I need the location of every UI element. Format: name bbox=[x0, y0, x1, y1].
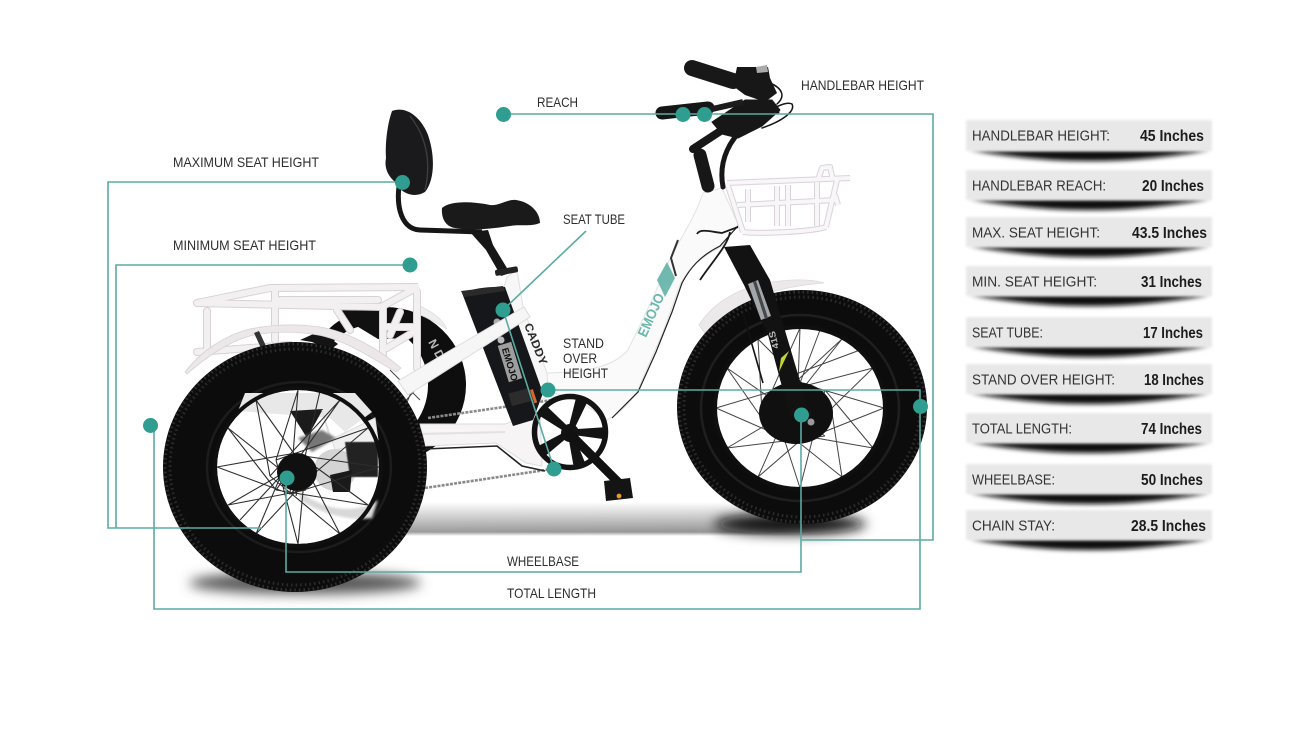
far rear wheel: N D bbox=[425, 337, 448, 362]
spec row: min seat height bbox=[966, 266, 1212, 306]
rear hub bbox=[277, 453, 317, 491]
rear rack bbox=[197, 287, 418, 368]
spec row: max seat height bbox=[966, 217, 1212, 257]
spec row: total length: 74 Inches bbox=[1141, 421, 1202, 438]
far rear wheel bbox=[304, 307, 466, 463]
measurement dots bbox=[143, 107, 928, 486]
diagram labels: SEAT TUBE bbox=[563, 211, 625, 227]
spec row: min seat height: 31 Inches bbox=[1141, 274, 1202, 291]
diagram labels: HEIGHT bbox=[563, 365, 608, 381]
lower handlebar grip bbox=[662, 102, 743, 113]
spec row: max seat height: MAX. SEAT HEIGHT: bbox=[972, 226, 1100, 242]
diagram labels: WHEELBASE bbox=[507, 553, 579, 569]
rear axle frame tubes bbox=[420, 412, 545, 471]
diagram labels: TOTAL LENGTH bbox=[507, 585, 596, 601]
front fender bbox=[699, 280, 824, 333]
fork bbox=[724, 245, 808, 416]
spec row: stand over height bbox=[966, 364, 1212, 404]
rear spokes bbox=[217, 390, 379, 544]
fork: 41S bbox=[767, 330, 781, 350]
rear fender near side bbox=[185, 325, 401, 374]
black cargo box under rack bbox=[337, 310, 413, 339]
seat tube bbox=[500, 270, 552, 405]
diagram labels: STAND bbox=[563, 335, 604, 351]
spec row: max seat height: 43.5 Inches bbox=[1132, 225, 1207, 242]
spec row: handlebar reach bbox=[966, 170, 1212, 210]
spec panel bbox=[966, 120, 1212, 550]
fender bracket bbox=[254, 331, 266, 348]
backrest bar bbox=[398, 182, 482, 232]
spec row: handlebar reach: HANDLEBAR REACH: bbox=[972, 178, 1106, 194]
front hub motor bbox=[759, 382, 833, 444]
drivetrain behind spokes bbox=[238, 393, 378, 519]
spec row: seat tube bbox=[966, 317, 1212, 357]
brand text: CADDY: CADDY bbox=[521, 322, 549, 367]
backrest bbox=[385, 110, 433, 195]
spec row: total length: TOTAL LENGTH: bbox=[972, 422, 1072, 438]
brake cable on frame bbox=[697, 227, 738, 280]
diagram labels bbox=[173, 77, 924, 601]
front wheel bbox=[677, 290, 927, 524]
diagonal frame tube bbox=[398, 307, 530, 395]
basket bbox=[727, 167, 850, 233]
chain bbox=[425, 400, 552, 488]
saddle bbox=[442, 200, 540, 229]
spec row: wheelbase bbox=[966, 464, 1212, 504]
front spokes bbox=[716, 328, 884, 488]
spec row: chain stay bbox=[966, 510, 1212, 550]
spec row: seat tube: SEAT TUBE: bbox=[972, 326, 1043, 342]
diagram labels: HANDLEBAR HEIGHT bbox=[801, 77, 924, 93]
battery bbox=[461, 286, 543, 426]
spec row: wheelbase: 50 Inches bbox=[1141, 472, 1203, 489]
upper handlebar grip bbox=[692, 65, 777, 102]
ground shadow bbox=[189, 502, 866, 594]
battery: EMOJO bbox=[499, 346, 519, 383]
spec row: chain stay: 28.5 Inches bbox=[1131, 518, 1206, 535]
rear fender far side bbox=[418, 306, 447, 329]
spec row: stand over height: STAND OVER HEIGHT: bbox=[972, 372, 1115, 388]
spec row: chain stay: CHAIN STAY: bbox=[972, 518, 1055, 534]
crank and pedal bbox=[570, 434, 633, 501]
diagram labels: MINIMUM SEAT HEIGHT bbox=[173, 237, 316, 253]
spec row: handlebar height: 45 Inches bbox=[1140, 128, 1204, 145]
diagram labels: OVER bbox=[563, 350, 597, 366]
spec row: wheelbase: WHEELBASE: bbox=[972, 472, 1055, 488]
chainring bbox=[534, 396, 606, 468]
diagram labels: REACH bbox=[537, 94, 578, 110]
main step-through frame bbox=[547, 188, 738, 420]
bike illustration bbox=[163, 65, 927, 592]
spec row: handlebar height: HANDLEBAR HEIGHT: bbox=[972, 128, 1110, 144]
stem and headset bbox=[693, 83, 793, 187]
frame stripes bbox=[657, 240, 678, 297]
brand text: EMOJO: EMOJO bbox=[634, 291, 667, 339]
seat clamp bbox=[495, 266, 518, 276]
spec row: total length bbox=[966, 413, 1212, 453]
near rear wheel bbox=[163, 342, 427, 592]
spec row: handlebar reach: 20 Inches bbox=[1142, 178, 1204, 195]
spec row: seat tube: 17 Inches bbox=[1143, 325, 1203, 342]
spec row: stand over height: 18 Inches bbox=[1144, 372, 1204, 389]
spec row: handlebar height bbox=[966, 120, 1212, 161]
diagram labels: MAXIMUM SEAT HEIGHT bbox=[173, 154, 319, 170]
seat post bbox=[470, 230, 510, 276]
shock mount behind fender bbox=[300, 331, 338, 350]
spec row: min seat height: MIN. SEAT HEIGHT: bbox=[972, 274, 1097, 290]
dimension lines bbox=[108, 114, 933, 609]
